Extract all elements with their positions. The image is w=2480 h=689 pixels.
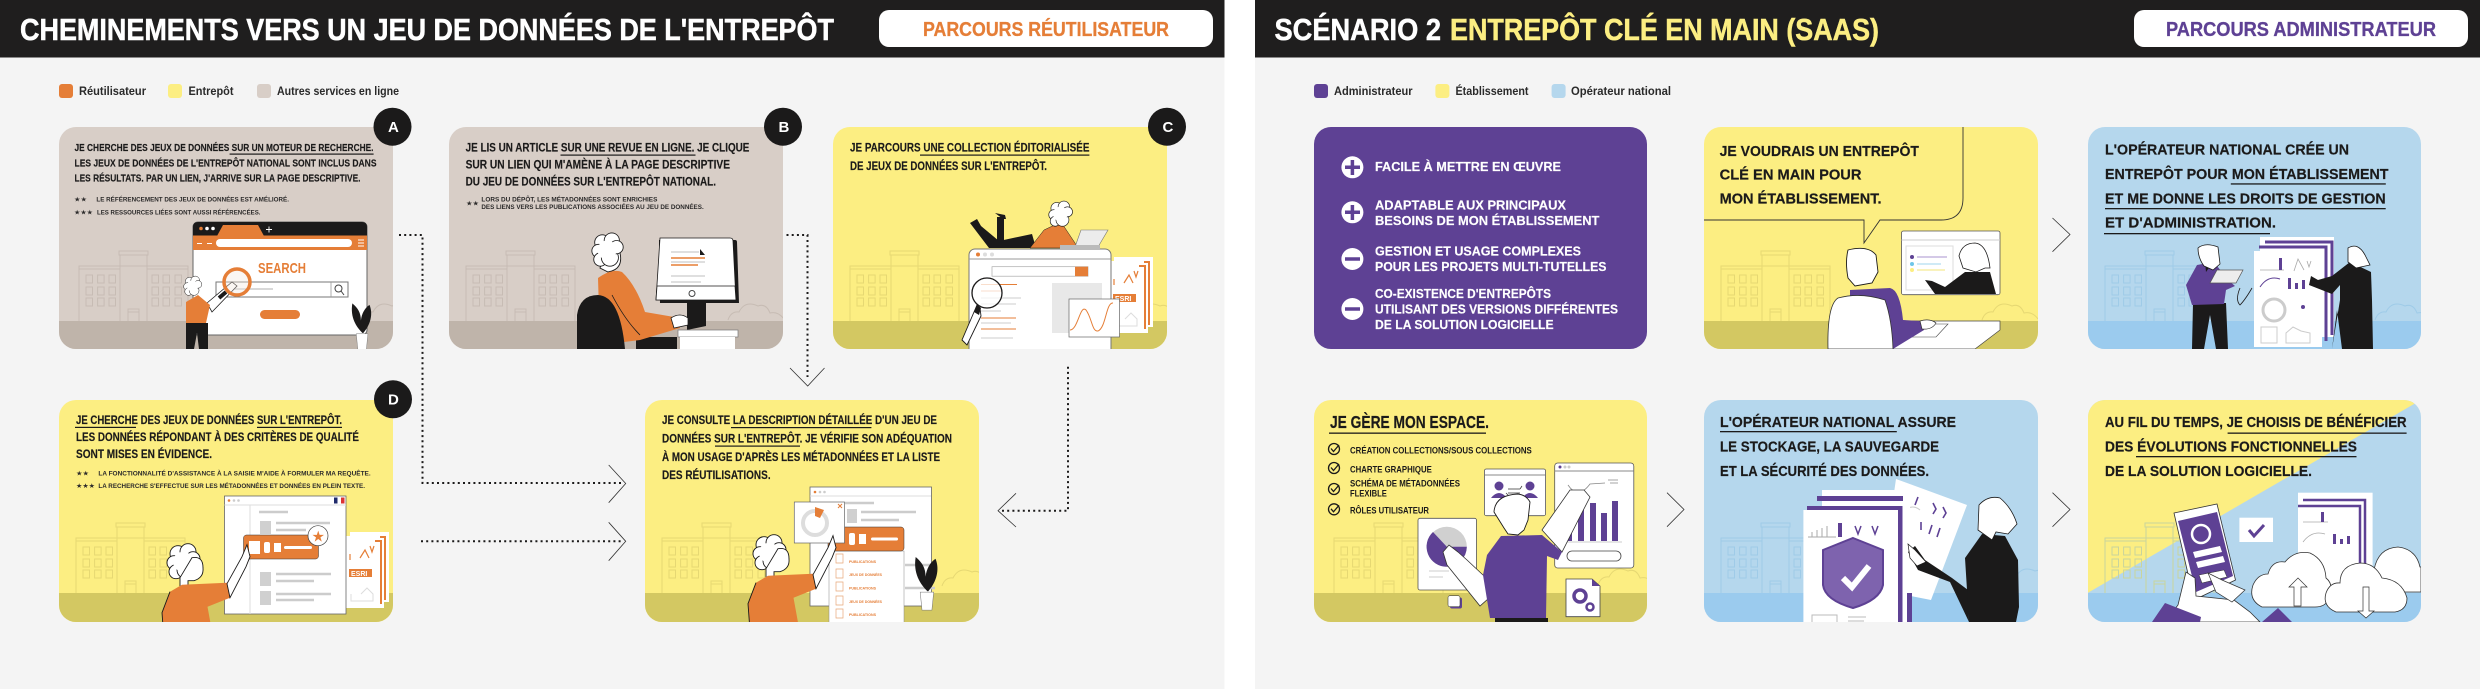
pros and cons text: ADAPTABLE AUX PRINCIPAUX (1375, 198, 1567, 212)
pros and cons text: CO-EXISTENCE D'ENTREPÔTS (1375, 286, 1551, 301)
icon: plus (1341, 201, 1363, 223)
badge D (374, 380, 412, 418)
text D: LES DONNÉES RÉPONDANT À DES CRITÈRES DE QUALITÉ (76, 431, 359, 444)
pros and cons text: DE LA SOLUTION LOGICIELLE (1375, 318, 1554, 332)
card: national operator storage (1704, 400, 2061, 622)
checklist: SCHÉMA DE MÉTADONNÉES (1350, 478, 1460, 489)
right panel background (1255, 0, 2480, 689)
text: turnkey wish: MON ÉTABLISSEMENT. (1720, 190, 1882, 207)
text: functional evolutions: DES ÉVOLUTIONS FONCTIONNELLES (2105, 439, 2357, 456)
text A: JE CHERCHE DES JEUX DE DONNÉES SUR UN MOTEUR DE RECHERCHE. (74, 141, 374, 154)
checklist: CHARTE GRAPHIQUE (1350, 464, 1432, 475)
text E: DES RÉUTILISATIONS. (662, 469, 771, 482)
text: national operator storage (1720, 414, 1956, 480)
checklist: CRÉATION COLLECTIONS/SOUS COLLECTIONS (1350, 445, 1532, 456)
badge A: A (388, 119, 399, 136)
text: national operator creates: ENTREPÔT POUR MON ÉTABLISSEMENT (2105, 165, 2388, 183)
text: national operator storage: L'OPÉRATEUR NATIONAL ASSURE (1720, 414, 1956, 431)
text A: LES JEUX DE DONNÉES DE L'ENTREPÔT NATIONAL SONT INCLUS DANS (74, 156, 376, 169)
arrow: B to description (786, 235, 824, 386)
header: right journey: PARCOURS ADMINISTRATEUR (2166, 19, 2436, 41)
arrow: A to description (399, 235, 626, 503)
card D: search on the repository: ★ (312, 528, 325, 546)
text: national operator creates (2104, 142, 2388, 234)
arrow: D to description (421, 522, 626, 561)
text C: JE PARCOURS UNE COLLECTION ÉDITORIALISÉE (850, 142, 1090, 155)
notes B: ★★ (466, 200, 479, 208)
pros and cons text: POUR LES PROJETS MULTI-TUTELLES (1375, 260, 1606, 274)
text: national operator creates: ET ME DONNE LES DROITS DE GESTION (2105, 190, 2386, 207)
badge B: B (778, 119, 790, 136)
text: functional evolutions: AU FIL DU TEMPS, JE CHOISIS DE BÉNÉFICIER (2105, 414, 2407, 431)
legend: right journey (1314, 83, 1671, 98)
panel: pros and cons (1314, 127, 1647, 349)
text A: LES RÉSULTATS. PAR UN LIEN, J'ARRIVE SUR LA PAGE DESCRIPTIVE. (74, 172, 361, 185)
notes D: LA RECHERCHE S'EFFECTUE SUR LES MÉTADONNÉES ET DONNÉES EN PLEIN TEXTE. (98, 481, 365, 490)
card E: detailed description: PUBLICATIONS (849, 586, 876, 590)
badge B (764, 108, 802, 146)
card E: detailed description (645, 400, 998, 631)
card E: detailed description: JEUX DE DONNÉES (849, 599, 882, 604)
icon: plus (1341, 156, 1363, 178)
icon: minus (1341, 248, 1363, 270)
text E: À MON USAGE D'APRÈS LES MÉTADONNÉES ET LA LISTE (662, 451, 940, 464)
notes D: ★★ (76, 470, 89, 478)
text E (662, 414, 952, 482)
legend: left journey: Entrepôt (188, 84, 234, 98)
icon: minus (1341, 298, 1363, 320)
badge A (374, 108, 412, 146)
text D (75, 414, 359, 461)
text B: DU JEU DE DONNÉES SUR L'ENTREPÔT NATIONAL. (466, 175, 716, 188)
notes A: ★★ (74, 196, 87, 204)
text A (74, 141, 376, 185)
checklist: FLEXIBLE (1350, 488, 1387, 499)
card: national operator creates (2088, 127, 2431, 349)
notes B: DES LIENS VERS LES PUBLICATIONS ASSOCIÉES AU JEU DE DONNÉES. (481, 202, 704, 211)
text D: JE CHERCHE DES JEUX DE DONNÉES SUR L'ENTREPÔT. (76, 414, 342, 427)
notes A: ★★★ (74, 210, 93, 216)
pros and cons text: BESOINS DE MON ÉTABLISSEMENT (1375, 213, 1600, 228)
card A: search engine (59, 108, 418, 349)
checklist (1328, 444, 1532, 516)
notes B (466, 194, 704, 211)
text C (850, 142, 1090, 173)
header: left journey (0, 0, 1224, 58)
text: national operator storage: LE STOCKAGE, LA SAUVEGARDE (1720, 439, 1939, 456)
text: turnkey wish (1720, 142, 1919, 207)
notes D (76, 468, 371, 490)
pros and cons text: GESTION ET USAGE COMPLEXES (1375, 244, 1581, 258)
legend: left journey (59, 84, 399, 98)
text D: SONT MISES EN ÉVIDENCE. (76, 448, 212, 461)
text: national operator creates: ET D'ADMINISTRATION. (2105, 215, 2276, 232)
card: functional evolutions (2088, 400, 2421, 622)
header: right journey: ENTREPÔT CLÉ EN MAIN (SAAS) (1450, 11, 1879, 47)
card B: online journal (449, 108, 802, 349)
legend: right journey: Opérateur national (1571, 84, 1671, 98)
text B: SUR UN LIEN QUI M'AMÈNE À LA PAGE DESCRIPTIVE (466, 158, 730, 172)
heading: I manage my space: JE GÈRE MON ESPACE. (1330, 411, 1489, 432)
legend: left journey: Réutilisateur (79, 84, 146, 98)
pros and cons text: FACILE À METTRE EN ŒUVRE (1375, 159, 1561, 174)
left panel background (0, 0, 1224, 689)
text: national operator creates: L'OPÉRATEUR NATIONAL CRÉE UN (2105, 142, 2349, 159)
arrow: chevron (2052, 218, 2070, 252)
text: national operator storage: ET LA SÉCURITÉ DES DONNÉES. (1720, 463, 1929, 480)
text B (466, 143, 750, 188)
card E: detailed description: PUBLICATIONS (849, 560, 876, 564)
text B: JE LIS UN ARTICLE SUR UNE REVUE EN LIGNE. JE CLIQUE (466, 143, 750, 155)
header: left journey: CHEMINEMENTS VERS UN JEU DE DONNÉES DE L'ENTREPÔT (20, 11, 834, 47)
pros and cons text (1375, 159, 1618, 332)
header: right journey (1255, 0, 2480, 58)
header: left journey: PARCOURS RÉUTILISATEUR (923, 18, 1169, 41)
text: functional evolutions: DE LA SOLUTION LOGICIELLE. (2105, 463, 2312, 480)
text C: DE JEUX DE DONNÉES SUR L'ENTREPÔT. (850, 160, 1047, 173)
arrow: C to description (998, 367, 1068, 527)
notes A (74, 194, 289, 216)
notes D: LA FONCTIONNALITÉ D'ASSISTANCE À LA SAISIE M'AIDE À FORMULER MA REQUÊTE. (98, 468, 371, 478)
badge C: C (1162, 119, 1174, 136)
card E: detailed description: JEUX DE DONNÉES (849, 572, 882, 577)
badge D: D (388, 392, 399, 408)
legend: right journey: Administrateur (1334, 84, 1413, 98)
legend: right journey: Établissement (1456, 83, 1528, 98)
checklist: RÔLES UTILISATEUR (1350, 504, 1429, 516)
card: I manage my space (1314, 400, 1654, 622)
notes A: LE RÉFÉRENCEMENT DES JEUX DE DONNÉES EST AMÉLIORÉ. (96, 194, 289, 204)
card E: detailed description: PUBLICATIONS (849, 613, 876, 617)
pros and cons text: UTILISANT DES VERSIONS DIFFÉRENTES (1375, 302, 1618, 316)
arrow: chevron (1667, 493, 1684, 527)
notes D: ★★★ (76, 483, 95, 490)
notes B: LORS DU DÉPÔT, LES MÉTADONNÉES SONT ENRICHIES (481, 194, 658, 203)
text: turnkey wish: JE VOUDRAIS UN ENTREPÔT (1720, 142, 1919, 160)
header: right journey: SCÉNARIO 2 (1274, 12, 1441, 47)
arrow: chevron (2052, 493, 2070, 527)
text E: DONNÉES SUR L'ENTREPÔT. JE VÉRIFIE SON ADÉQUATION (662, 432, 952, 446)
text E: JE CONSULTE LA DESCRIPTION DÉTAILLÉE D'UN JEU DE (662, 414, 937, 427)
notes A: LES RESSOURCES LIÉES SONT AUSSI RÉFÉRENCÉES. (97, 208, 261, 216)
card: turnkey wish (1704, 127, 2038, 349)
card C: editorial collection (833, 108, 1186, 364)
badge C (1148, 108, 1186, 146)
legend: left journey: Autres services en ligne (277, 84, 399, 98)
text: functional evolutions (2105, 414, 2407, 480)
card A: search engine: SEARCH (258, 260, 306, 277)
text: turnkey wish: CLÉ EN MAIN POUR (1720, 167, 1862, 184)
card D: search on the repository (59, 380, 412, 640)
